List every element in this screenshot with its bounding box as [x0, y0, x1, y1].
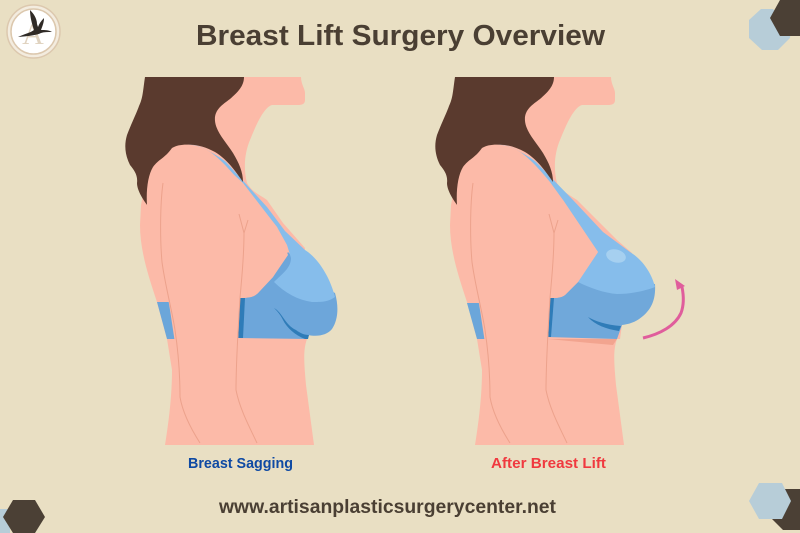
torso and neck skin [450, 77, 632, 445]
figure: after breast lift [435, 77, 655, 445]
label: after breast lift: After Breast Lift [491, 456, 606, 472]
highlight [605, 247, 627, 265]
strap and light upper cup [172, 144, 335, 302]
back band [467, 303, 485, 339]
shadow below band [548, 339, 617, 345]
back band [157, 302, 176, 339]
figure: breast sagging [125, 77, 337, 445]
arm lines [471, 183, 567, 443]
strap and light upper cup [482, 144, 655, 294]
band side shadow [238, 298, 245, 338]
hair [125, 77, 244, 206]
corner decoration: top right [749, 0, 800, 50]
arm lines [161, 183, 257, 443]
corner decoration: bottom left [0, 500, 45, 533]
torso and neck skin [140, 77, 314, 445]
under-cup crease [588, 317, 621, 331]
under-cup crease [274, 308, 309, 339]
band side shadow [547, 298, 554, 337]
arm skin [457, 145, 598, 445]
arm skin [147, 145, 288, 445]
label: breast sagging: Breast Sagging [188, 456, 293, 472]
logo [7, 5, 60, 58]
bra band and lower cup [547, 280, 655, 339]
logo: A [22, 18, 44, 51]
website url: www.artisanplasticsurgerycenter.net [218, 497, 557, 518]
bra band and lower cup [238, 252, 337, 339]
hair [435, 77, 554, 206]
title: Breast Lift Surgery Overview [196, 20, 605, 52]
arrow: lift direction [643, 279, 685, 338]
corner decoration: bottom right [749, 483, 800, 530]
